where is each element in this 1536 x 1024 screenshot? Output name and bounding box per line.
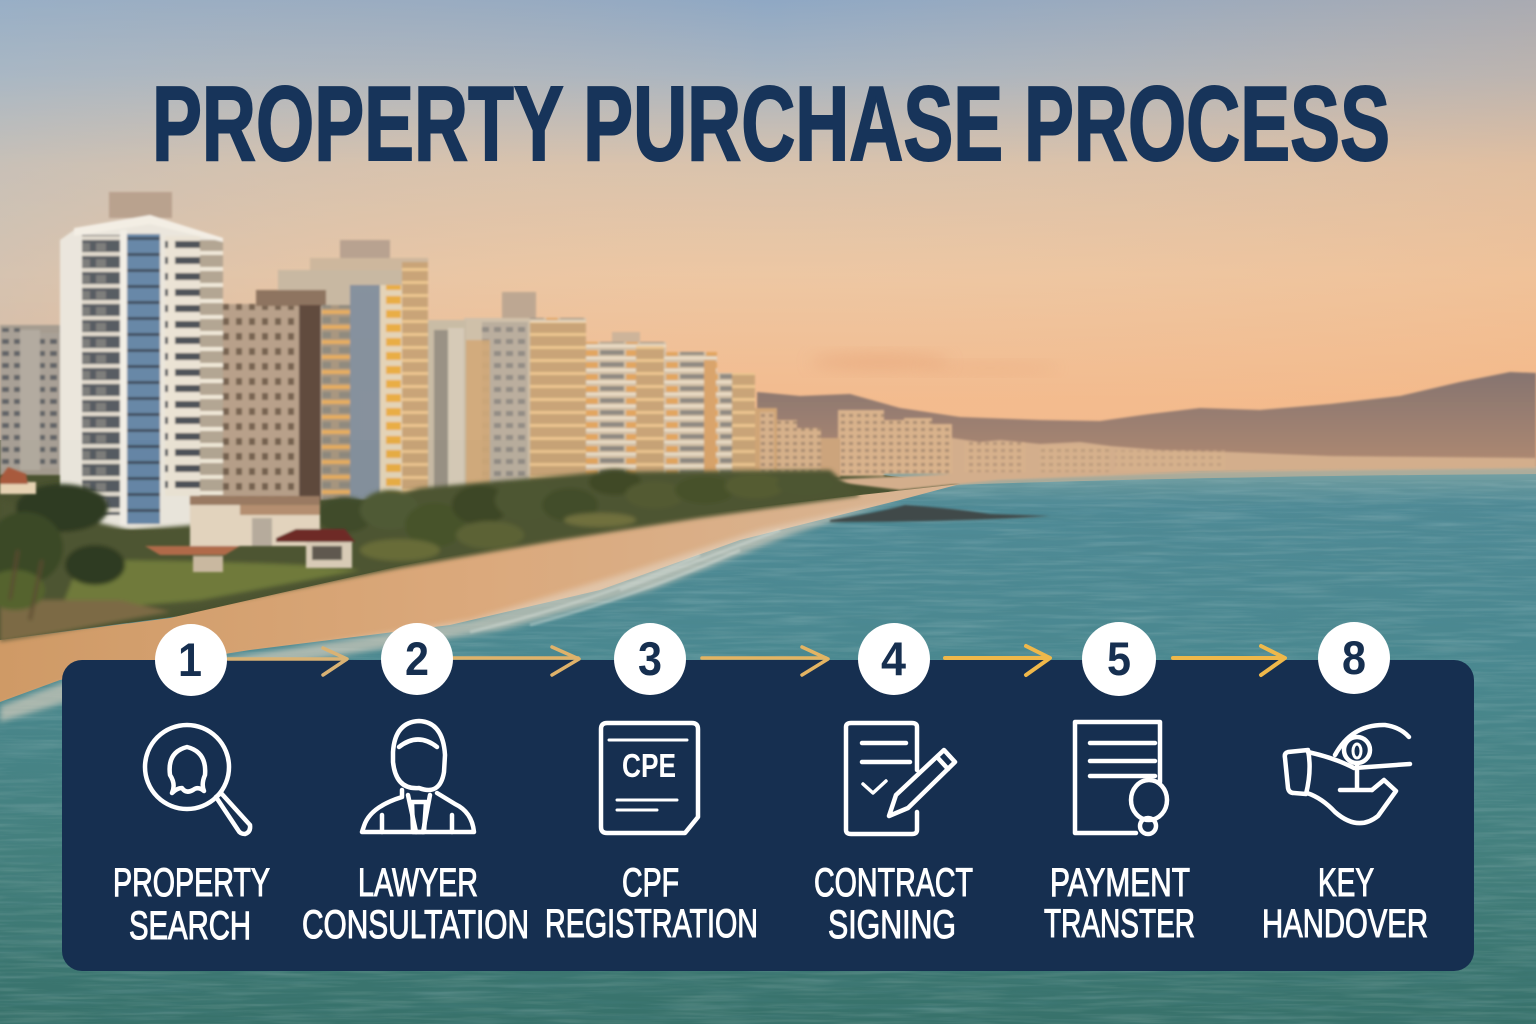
label: cpf registration: CPF (622, 861, 679, 905)
building: tower 717 (717, 373, 755, 483)
step 4: contract signing (814, 623, 973, 947)
icon: lawyer bust (362, 721, 474, 832)
icon: document with seal (1075, 722, 1167, 834)
icon: contract and pencil (846, 723, 955, 834)
number badge 8: 8 (1342, 631, 1366, 684)
building: far receding towers (755, 408, 840, 478)
building: brown block (222, 290, 350, 500)
label: payment transfer: PAYMENT (1050, 861, 1190, 905)
panel: process steps (62, 622, 1474, 971)
number badge 5: 5 (1107, 632, 1131, 685)
label: key handover: HANDOVER (1262, 902, 1428, 946)
label: payment transfer (1044, 861, 1195, 946)
label: lawyer consultation (302, 861, 529, 947)
beachfront buildings (0, 192, 840, 530)
background: sunset sky (0, 0, 1536, 500)
sea (0, 466, 1536, 1024)
building: tower 464 (464, 292, 586, 494)
label: key handover: KEY (1318, 861, 1374, 905)
number badge 3 (614, 623, 686, 695)
label: property search: PROPERTY (113, 861, 270, 905)
label: contract signing: SIGNING (828, 903, 956, 947)
building: far left block (0, 325, 60, 475)
step 5: payment transfer (1044, 622, 1195, 946)
label: key handover (1262, 861, 1428, 946)
label: payment transfer: TRANSTER (1044, 902, 1195, 946)
number badge 2: 2 (405, 632, 429, 685)
number badge 4: 4 (881, 632, 906, 685)
step 2: lawyer consultation (302, 623, 529, 947)
label: cpf registration: REGISTRATION (545, 902, 758, 946)
building: main white tower (60, 192, 223, 530)
mountains on the horizon (757, 372, 1536, 470)
step 6: key handover (1262, 622, 1428, 946)
number badge 4 (858, 623, 930, 695)
label: property search (113, 861, 270, 948)
building: tower 665 (665, 352, 717, 486)
label: cpf registration (545, 861, 758, 946)
beachfront trees and grass (0, 469, 860, 642)
number badge 1: 1 (178, 633, 202, 686)
step 1: property search (113, 624, 270, 948)
icon: cpf document (601, 723, 698, 833)
arrow 1 to 2 (228, 648, 347, 675)
step 3: cpf registration (545, 623, 758, 946)
building: tower 586 (586, 332, 666, 488)
icon: hand with key (1285, 725, 1410, 823)
offshore rock island (830, 505, 1050, 522)
number badge 3: 3 (638, 632, 662, 685)
distant skyline (820, 410, 1536, 490)
label: lawyer consultation: CONSULTATION (302, 903, 529, 947)
arrow 5 to 6 (1173, 646, 1285, 675)
number badge 2 (381, 623, 453, 695)
arrow 4 to 5 (945, 646, 1050, 675)
number badge 8 (1318, 622, 1390, 694)
label: property search: SEARCH (129, 904, 251, 948)
land behind the buildings (0, 440, 960, 640)
arrow 2 to 3 (453, 647, 579, 675)
icon: magnifier with person (145, 725, 250, 834)
number badge 1 (155, 624, 227, 696)
label: contract signing (814, 861, 973, 947)
label: contract signing: CONTRACT (814, 861, 973, 905)
building: narrow tower 428 (428, 320, 466, 496)
number badge 5 (1082, 622, 1156, 696)
building: tower 278 (278, 240, 428, 500)
beach and coastline (0, 484, 960, 722)
small beach houses (0, 467, 355, 572)
label: lawyer consultation: LAWYER (358, 861, 478, 905)
arrow 3 to 4 (702, 647, 828, 675)
icon: cpf document: CPE (622, 747, 676, 784)
